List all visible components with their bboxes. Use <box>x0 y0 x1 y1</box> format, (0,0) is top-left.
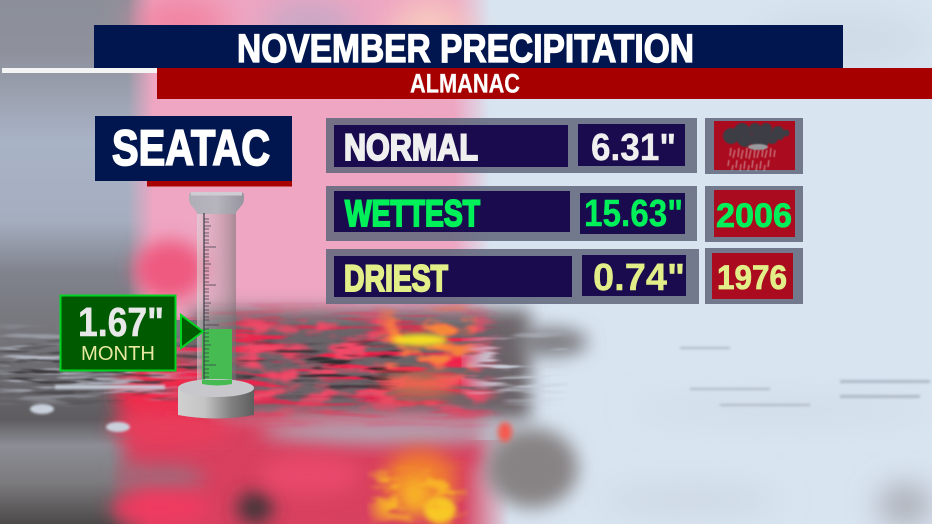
gauge water level <box>202 329 232 384</box>
callout: monthly total: 1.67" <box>78 299 164 345</box>
panel: normal row <box>326 118 697 173</box>
gauge tube <box>197 212 236 384</box>
title bar <box>94 25 843 71</box>
panel: driest row <box>326 249 699 304</box>
title bar: NOVEMBER PRECIPITATION <box>237 27 694 71</box>
wettest label: WETTEST <box>345 193 480 234</box>
arrow: pointer to water level <box>181 315 203 348</box>
callout: monthly total: MONTH <box>81 343 155 365</box>
icon: rain cloud <box>723 123 790 171</box>
soft lower puddle colours <box>110 328 588 524</box>
normal value: 6.31" <box>591 127 676 169</box>
ripple layers <box>0 335 210 395</box>
panel: normal icon box <box>705 118 803 174</box>
normal label: NORMAL <box>344 127 478 168</box>
location label: SEATAC: SEATAC <box>112 120 270 176</box>
panel: wettest row <box>326 186 697 241</box>
panel: driest year <box>705 248 803 304</box>
subtitle bar: ALMANAC <box>410 68 520 98</box>
panel: wettest year <box>705 186 803 242</box>
location label: SEATAC <box>95 116 292 186</box>
white accent line <box>2 68 157 73</box>
gauge base <box>178 379 254 418</box>
callout: monthly total <box>60 296 176 370</box>
panel: driest year: 1976 <box>717 259 787 297</box>
driest value: 0.74" <box>593 257 685 299</box>
gauge top cap <box>189 192 244 214</box>
rain gauge <box>178 192 254 418</box>
wettest value: 15.63" <box>584 193 683 235</box>
subtitle bar <box>157 68 932 99</box>
gauge scale <box>204 213 219 383</box>
driest label: DRIEST <box>344 258 448 299</box>
panel: wettest year: 2006 <box>716 197 792 235</box>
